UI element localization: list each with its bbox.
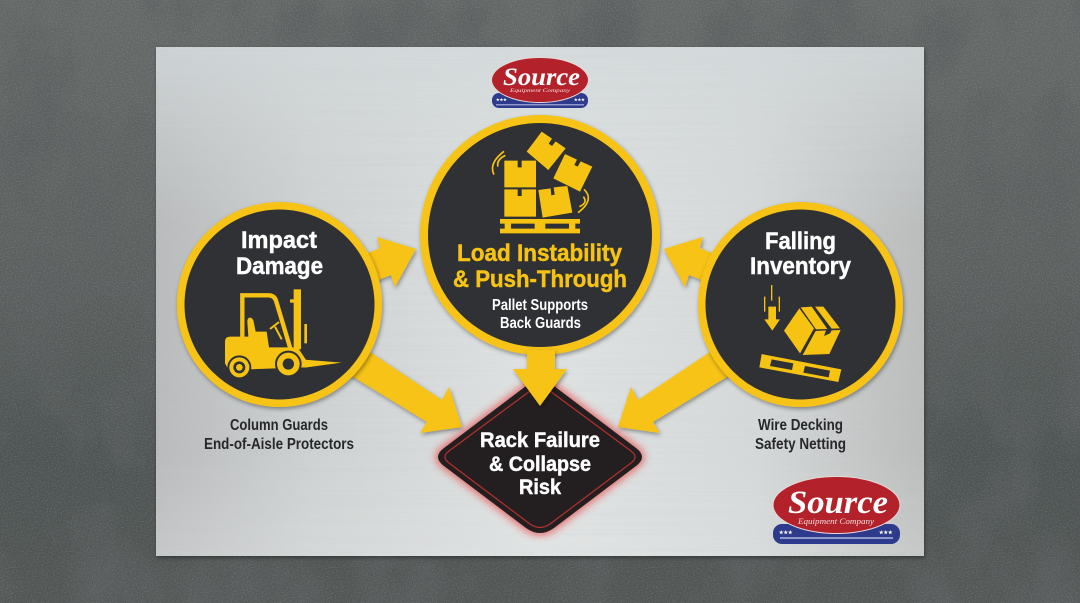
logo: bottom Source Equipment Company: Source — [788, 485, 888, 521]
text: impact damage solutions — [204, 417, 354, 453]
logo: top Source Equipment Company: Equipment Company — [509, 88, 571, 94]
heading: impact damage — [236, 227, 323, 280]
heading: falling inventory — [750, 228, 852, 280]
heading: load instability: Load Instability — [457, 240, 623, 267]
circle: impact damage — [177, 202, 382, 407]
solutions: pallet supports, back guards — [492, 297, 588, 332]
logo: top Source Equipment Company: ★★★ — [496, 97, 507, 102]
text: falling inventory solutions — [755, 417, 846, 453]
heading: rack failure text: Risk — [519, 476, 561, 499]
icon: forklift — [225, 289, 342, 379]
logo: top Source Equipment Company — [491, 57, 589, 108]
circle: falling inventory — [698, 202, 903, 407]
heading: falling inventory: Falling — [765, 228, 836, 255]
logo: bottom Source Equipment Company: ★★★ — [779, 530, 793, 536]
arrow: impact damage to rack failure — [350, 352, 462, 433]
arrow: falling inventory to load instability — [664, 237, 714, 287]
arrow: impact damage to load instability — [366, 237, 416, 287]
logo: bottom Source Equipment Company: Equipment Company — [797, 517, 875, 526]
text: impact damage solutions: End-of-Aisle Protectors — [204, 436, 354, 453]
text: falling inventory solutions: Safety Netting — [755, 436, 846, 453]
heading: rack failure text: & Collapse — [489, 453, 591, 476]
text: falling inventory solutions: Wire Decking — [758, 417, 843, 434]
diamond: rack failure and collapse risk — [438, 381, 642, 533]
icon: falling box and pallet — [759, 285, 841, 382]
heading: impact damage: Damage — [236, 253, 323, 280]
circle: load instability and push-through — [420, 115, 660, 355]
heading: falling inventory: Inventory — [750, 253, 852, 280]
panel: brushed metal sign — [156, 47, 924, 556]
icon: tumbling boxes on pallet — [492, 132, 592, 233]
logo: top Source Equipment Company: ★★★ — [574, 97, 585, 102]
heading: impact damage: Impact — [241, 227, 317, 254]
solutions: pallet supports, back guards: Pallet Supports — [492, 297, 588, 314]
text: impact damage solutions: Column Guards — [230, 417, 328, 434]
panel sheen — [156, 47, 924, 556]
arrow: load instability to rack failure — [513, 350, 567, 406]
arrow: falling inventory to rack failure — [618, 352, 730, 433]
heading: load instability — [453, 240, 627, 293]
logo: top Source Equipment Company: Source — [503, 64, 580, 91]
logo: bottom Source Equipment Company: ★★★ — [879, 530, 893, 536]
solutions: pallet supports, back guards: Back Guards — [500, 315, 581, 332]
heading: rack failure text — [480, 429, 600, 499]
heading: rack failure text: Rack Failure — [480, 429, 600, 452]
heading: load instability: & Push-Through — [453, 266, 627, 293]
logo: bottom Source Equipment Company — [772, 476, 900, 544]
